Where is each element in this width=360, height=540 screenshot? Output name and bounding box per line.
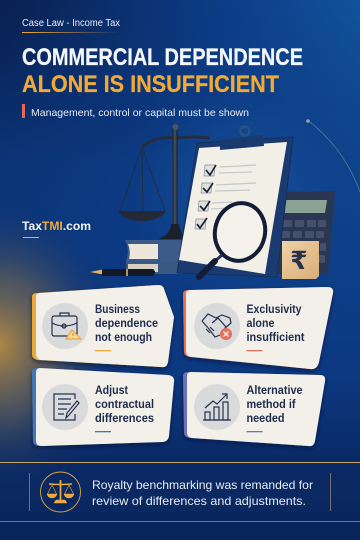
card text xyxy=(246,385,302,425)
card text: differences xyxy=(95,413,154,425)
title: ALONE IS INSUFFICIENT xyxy=(22,71,279,98)
card text: Alternative xyxy=(246,385,302,397)
brand: TaxTMI.com xyxy=(22,219,91,233)
card text: not enough xyxy=(95,332,152,344)
panel: adjust differences xyxy=(32,368,174,446)
icon: gold scales xyxy=(40,472,80,512)
card text: contractual xyxy=(95,399,154,411)
footer text: review of differences and adjustments. xyxy=(92,494,306,508)
illustration: legal and tax desk xyxy=(90,124,335,279)
icon: books xyxy=(125,240,182,274)
card text xyxy=(246,304,305,344)
card text xyxy=(95,304,158,344)
card text: insufficient xyxy=(246,332,305,344)
footer text: Royalty benchmarking was remanded for xyxy=(92,478,313,492)
card text: Business xyxy=(95,304,140,316)
card text xyxy=(95,385,154,425)
icon: calculator xyxy=(277,191,335,273)
card text: dependence xyxy=(95,318,158,330)
card text: needed xyxy=(246,413,284,425)
icon: briefcase warning xyxy=(42,303,88,349)
footer text xyxy=(92,478,313,508)
card text: Exclusivity xyxy=(246,304,302,316)
icon: rupee cube: ₹ xyxy=(290,246,308,275)
subtitle: Management, control or capital must be shown xyxy=(31,107,249,119)
icon: document with pen xyxy=(42,384,88,430)
icon: magnifying glass xyxy=(199,198,270,277)
panel: business dependence xyxy=(32,285,174,367)
card text: alone xyxy=(246,318,274,330)
icon: clipboard checklist xyxy=(177,126,293,277)
icon: handshake cancelled xyxy=(194,303,240,349)
card text: method if xyxy=(246,399,296,411)
icon: rupee cube xyxy=(282,241,319,279)
card text: Adjust xyxy=(95,385,128,397)
header label: Case Law - Income Tax xyxy=(22,18,120,29)
footer callout xyxy=(0,462,360,522)
panel: alternative method xyxy=(183,372,325,446)
panel: exclusivity xyxy=(183,287,333,369)
icon: scales of justice xyxy=(118,124,210,239)
icon: rising bar chart xyxy=(194,384,240,430)
title: COMMERCIAL DEPENDENCE xyxy=(22,44,303,71)
title xyxy=(22,44,303,98)
icon: pen xyxy=(90,269,155,276)
